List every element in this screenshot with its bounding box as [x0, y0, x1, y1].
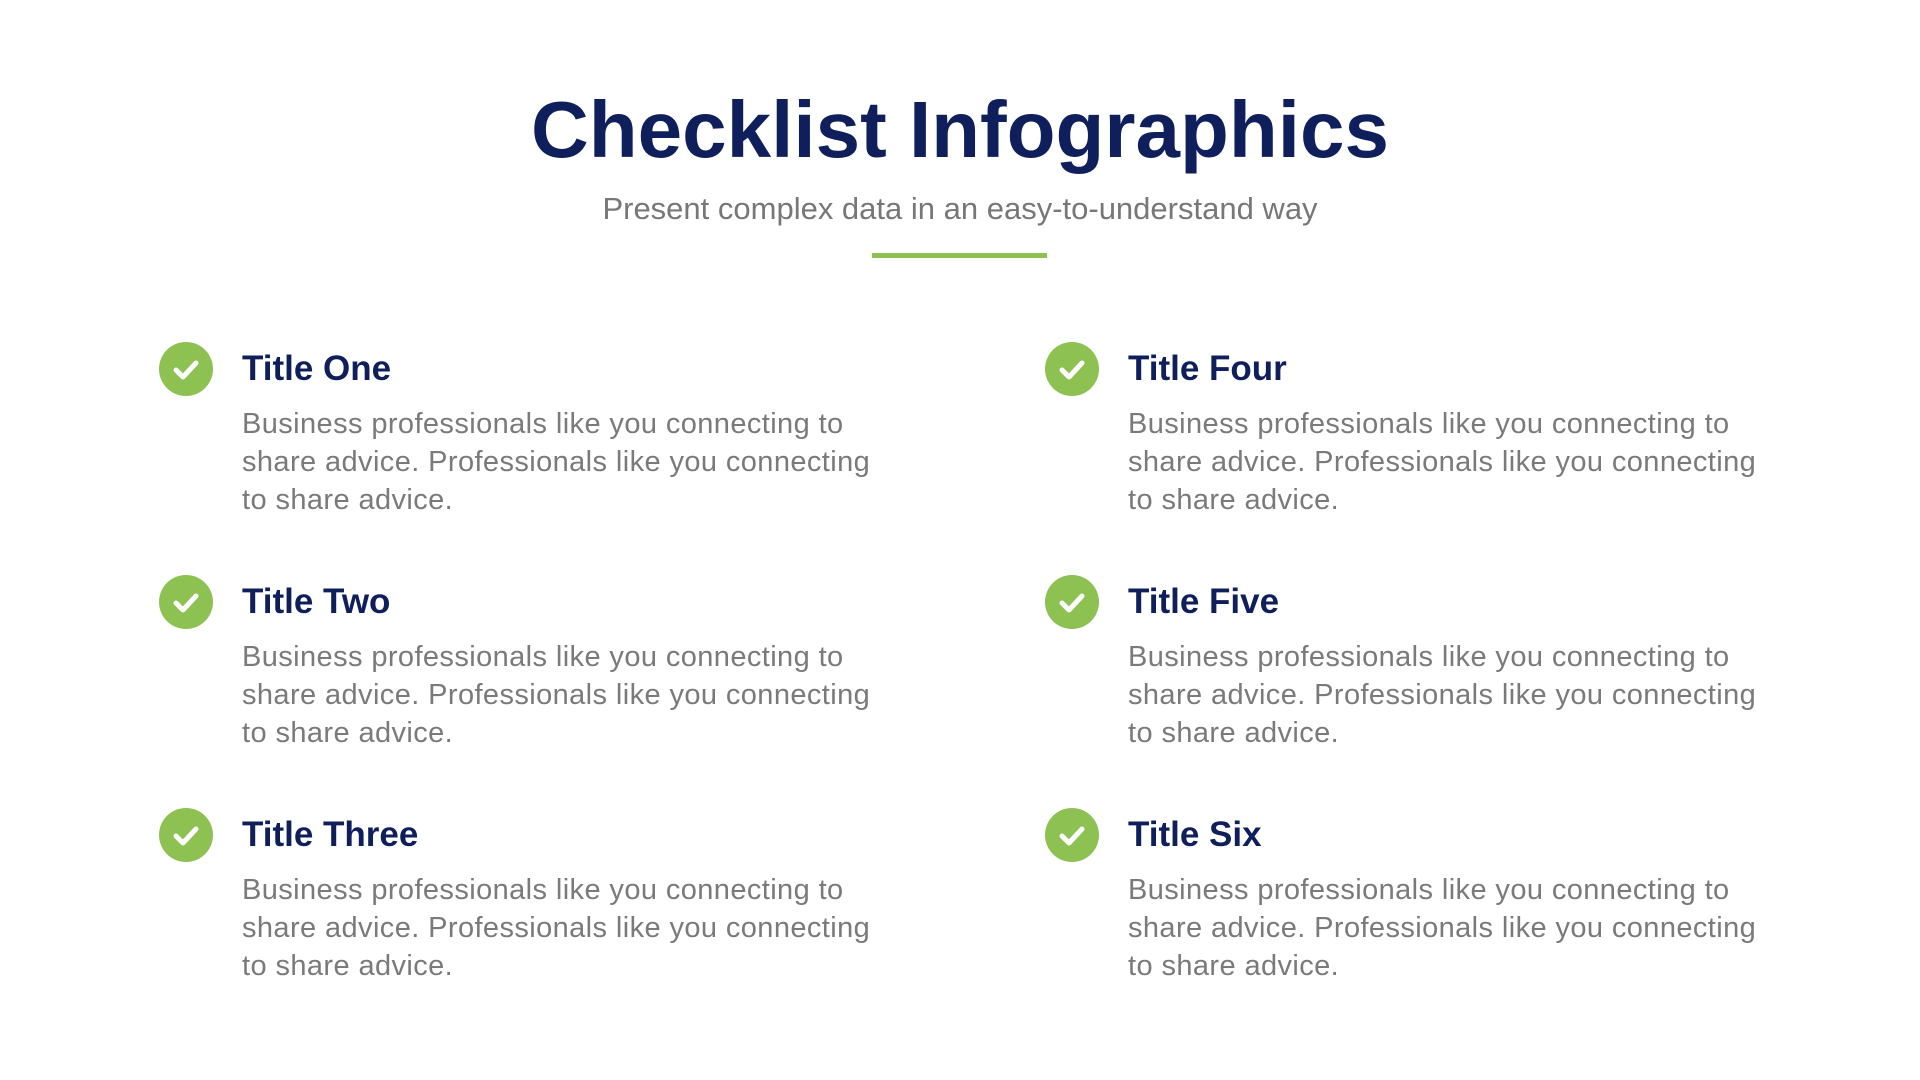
- body text: [1128, 408, 1756, 516]
- body text: share advice. Professionals like you connecting: [1128, 912, 1756, 944]
- body text: Business professionals like you connecting to: [1128, 641, 1730, 673]
- heading: Title Two: [242, 582, 390, 621]
- accent underline: [872, 253, 1047, 258]
- body text: share advice. Professionals like you connecting: [242, 912, 870, 944]
- body text: [242, 874, 870, 982]
- heading: Title Four: [1128, 349, 1287, 388]
- heading: Title Five: [1128, 582, 1279, 621]
- item: title one: [159, 342, 870, 516]
- icon: check: [159, 808, 213, 862]
- body text: to share advice.: [242, 484, 453, 516]
- heading: Title Six: [1128, 815, 1262, 854]
- body text: to share advice.: [242, 717, 453, 749]
- body text: Business professionals like you connecting to: [242, 874, 844, 906]
- item: title three: [159, 808, 870, 982]
- body text: to share advice.: [1128, 950, 1339, 982]
- body text: [242, 641, 870, 749]
- body text: Business professionals like you connecting to: [242, 408, 844, 440]
- icon: check: [1045, 342, 1099, 396]
- body text: [1128, 641, 1756, 749]
- body text: share advice. Professionals like you connecting: [1128, 446, 1756, 478]
- icon: check: [159, 342, 213, 396]
- heading: Title One: [242, 349, 391, 388]
- body text: share advice. Professionals like you connecting: [1128, 679, 1756, 711]
- body text: to share advice.: [242, 950, 453, 982]
- body text: Business professionals like you connecting to: [242, 641, 844, 673]
- title: Checklist Infographics: [531, 85, 1389, 174]
- body text: Business professionals like you connecting to: [1128, 408, 1730, 440]
- item: title six: [1045, 808, 1756, 982]
- icon: check: [1045, 808, 1099, 862]
- item: title two: [159, 575, 870, 749]
- icon: check: [1045, 575, 1099, 629]
- subtitle: Present complex data in an easy-to-understand way: [602, 191, 1318, 226]
- item: title four: [1045, 342, 1756, 516]
- body text: share advice. Professionals like you connecting: [242, 679, 870, 711]
- heading: Title Three: [242, 815, 418, 854]
- icon: check: [159, 575, 213, 629]
- body text: to share advice.: [1128, 484, 1339, 516]
- body text: to share advice.: [1128, 717, 1339, 749]
- body text: [1128, 874, 1756, 982]
- body text: Business professionals like you connecting to: [1128, 874, 1730, 906]
- body text: [242, 408, 870, 516]
- item: title five: [1045, 575, 1756, 749]
- body text: share advice. Professionals like you connecting: [242, 446, 870, 478]
